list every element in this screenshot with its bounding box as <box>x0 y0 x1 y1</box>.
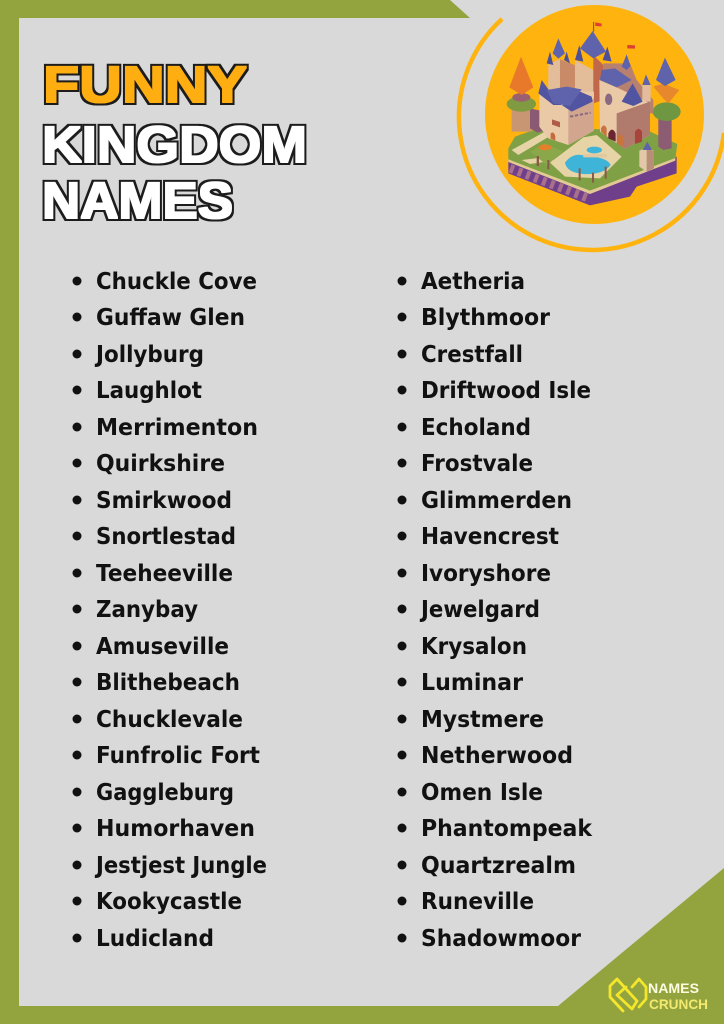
list: left column: Snortlestad <box>96 524 236 550</box>
list: right column: Phantompeak <box>421 816 593 842</box>
list: right column: Omen Isle <box>421 780 543 806</box>
title: KINGDOM <box>42 116 307 173</box>
right tower <box>658 117 672 150</box>
list: left column: Zanybay <box>96 597 198 623</box>
title <box>42 56 307 229</box>
list: left column: Jestjest Jungle <box>94 853 267 879</box>
title: NAMES <box>42 172 233 229</box>
courtyard <box>550 135 622 178</box>
gate tower <box>639 147 654 172</box>
posts and trees <box>537 156 607 183</box>
left tower <box>512 107 532 132</box>
list: left column: Chucklevale <box>96 707 243 733</box>
list: right column: Netherwood <box>421 743 573 769</box>
central tower <box>575 60 593 103</box>
list: right column: Luminar <box>421 670 524 696</box>
list: left column: Teeheeville <box>96 561 233 587</box>
list: left column: Amuseville <box>96 634 229 660</box>
list: left column: Blithebeach <box>96 670 240 696</box>
list: left column: Quirkshire <box>96 451 225 477</box>
icon: castle in orange circle <box>485 5 704 224</box>
flags <box>592 22 595 32</box>
list: right column: Blythmoor <box>421 305 551 331</box>
list: left column: Kookycastle <box>96 889 242 915</box>
title: FUNNY <box>43 56 247 113</box>
list: right column: Havencrest <box>421 524 559 550</box>
list: right column: Krysalon <box>421 634 527 660</box>
list: left column: Jollyburg <box>94 342 204 368</box>
list: right column: Driftwood Isle <box>421 378 591 404</box>
list: right column: Shadowmoor <box>421 926 582 952</box>
list: left column: Smirkwood <box>96 488 232 514</box>
list: right column: Runeville <box>421 889 534 915</box>
back-left tower <box>548 59 570 100</box>
list: left column: Gaggleburg <box>96 780 234 806</box>
back right mass <box>603 63 653 113</box>
logo: Names Crunch: NAMES <box>648 980 699 996</box>
list: right column: Mystmere <box>421 707 544 733</box>
island top <box>508 127 677 193</box>
logo: Names Crunch: CRUNCH <box>649 996 708 1012</box>
list: right column: Glimmerden <box>421 488 572 514</box>
right block <box>599 80 650 149</box>
list: right column: Ivoryshore <box>421 561 551 587</box>
list: right column: Crestfall <box>421 342 523 368</box>
list: left column: Chuckle Cove <box>96 269 257 295</box>
list: left column: Merrimenton <box>96 415 258 441</box>
list: left column: Guffaw Glen <box>96 305 245 331</box>
logo: Names Crunch <box>610 979 708 1012</box>
list: left column: Humorhaven <box>96 816 255 842</box>
list: left column: Ludicland <box>96 926 214 952</box>
list: right column: Frostvale <box>421 451 533 477</box>
island cliff <box>508 157 677 205</box>
list: left column: Laughlot <box>96 378 202 404</box>
left block <box>539 92 594 145</box>
list: left column <box>72 269 267 952</box>
list: right column: Echoland <box>421 415 531 441</box>
list: right column <box>398 269 593 952</box>
list: right column: Jewelgard <box>419 597 540 623</box>
decorative ring <box>459 19 724 250</box>
list: right column: Quartzrealm <box>421 853 576 879</box>
list: left column: Funfrolic Fort <box>96 743 260 769</box>
list: right column: Aetheria <box>421 269 525 295</box>
